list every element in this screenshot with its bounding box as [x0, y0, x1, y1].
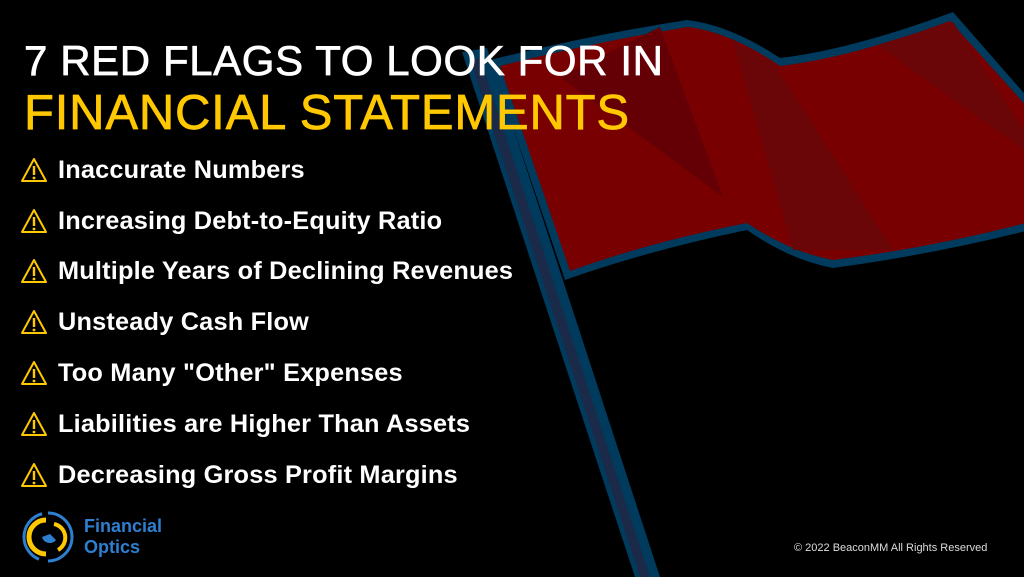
list of red flags: Multiple Years of Declining Revenues — [58, 256, 513, 284]
title — [24, 37, 664, 140]
logo: Financial Optics — [22, 512, 162, 562]
list of red flags: Unsteady Cash Flow — [58, 308, 309, 336]
logo: Financial Optics: Optics — [84, 537, 140, 557]
list of red flags: Liabilities are Higher Than Assets — [58, 410, 470, 438]
flag pole — [462, 48, 660, 577]
list of red flags: Increasing Debt-to-Equity Ratio — [58, 206, 442, 234]
list of red flags: Decreasing Gross Profit Margins — [58, 460, 458, 488]
logo: Financial Optics: Financial — [84, 516, 162, 536]
title: FINANCIAL STATEMENTS — [24, 86, 630, 140]
list of red flags: Inaccurate Numbers — [58, 156, 305, 184]
list of red flags: Too Many "Other" Expenses — [58, 358, 403, 386]
title: 7 RED FLAGS TO LOOK FOR IN — [24, 37, 664, 84]
logo icon — [22, 512, 74, 562]
flag cloth — [490, 12, 1024, 280]
copyright: © 2022 BeaconMM All Rights Reserved — [794, 542, 987, 554]
list of red flags — [21, 156, 513, 488]
